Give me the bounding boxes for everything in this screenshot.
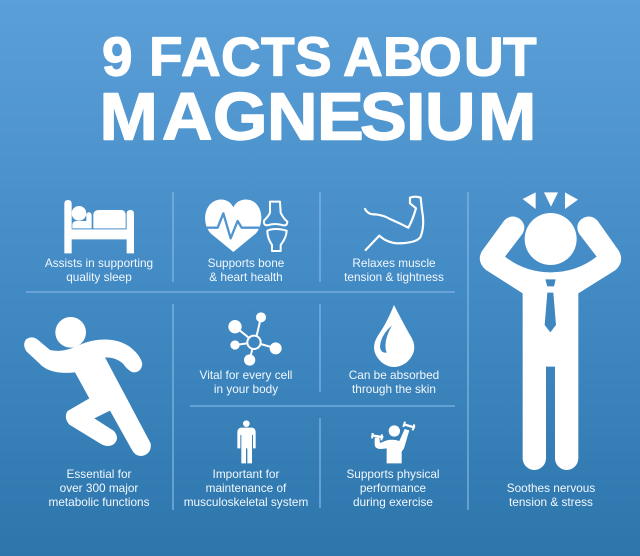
caption: nervous tension [507,481,595,509]
caption: sleep: Assists in supporting [45,256,153,270]
caption: sleep: quality sleep [66,270,132,284]
icon: running man [24,317,151,456]
fact: nervous tension [480,192,621,509]
caption: musculoskeletal [184,467,308,509]
caption: muscle: tension & tightness [344,270,444,284]
caption: musculoskeletal: Important for [213,467,280,481]
caption: skin: Can be absorbed [349,368,439,382]
caption: skin: through the skin [352,382,436,396]
caption: musculoskeletal: maintenance of [206,481,287,495]
caption: metabolic: metabolic functions [49,495,150,509]
icon: bed [64,200,134,253]
fact: quality sleep [45,200,153,284]
caption: musculoskeletal: musculoskeletal system [184,495,308,509]
caption: nervous tension: Soothes nervous [507,481,595,495]
icon: heart with pulse [205,199,261,252]
icon: molecule [228,312,282,366]
caption: exercise: performance [360,481,427,495]
caption: exercise: during exercise [353,495,433,509]
icon: knee joint [264,202,287,251]
icon: flexed arm [365,197,423,250]
fact: metabolic functions [24,317,151,509]
caption: metabolic: over 300 major [60,481,138,495]
caption: muscle: Relaxes muscle [352,256,436,270]
caption: bone and heart: Supports bone [208,256,285,270]
caption: muscle [344,256,444,284]
fact: muscle [344,197,444,284]
title: MAGNESIUM [100,80,536,154]
icon: water drop [374,305,414,367]
icon: standing man [237,420,256,463]
caption: nervous tension: tension & stress [509,495,593,509]
title: 9 FACTS ABOUT [102,26,537,88]
caption: bone and heart [208,256,285,284]
caption: cell [200,368,292,396]
caption: sleep [45,256,153,284]
icon: man lifting dumbbells [372,422,415,463]
icon: stressed man [480,192,621,470]
caption: bone and heart: & heart health [209,270,283,284]
caption: metabolic [49,467,150,509]
caption: skin [349,368,439,396]
fact: bone and heart [205,199,287,284]
fact: skin absorption [349,305,439,396]
fact: musculoskeletal [184,420,308,509]
title [100,26,537,154]
caption: metabolic: Essential for [67,467,132,481]
fact: exercise [346,422,440,509]
caption: cell: in your body [214,382,278,396]
caption: exercise: Supports physical [346,467,440,481]
caption: cell: Vital for every cell [200,368,292,382]
caption: exercise [346,467,440,509]
fact: every cell [200,312,292,396]
